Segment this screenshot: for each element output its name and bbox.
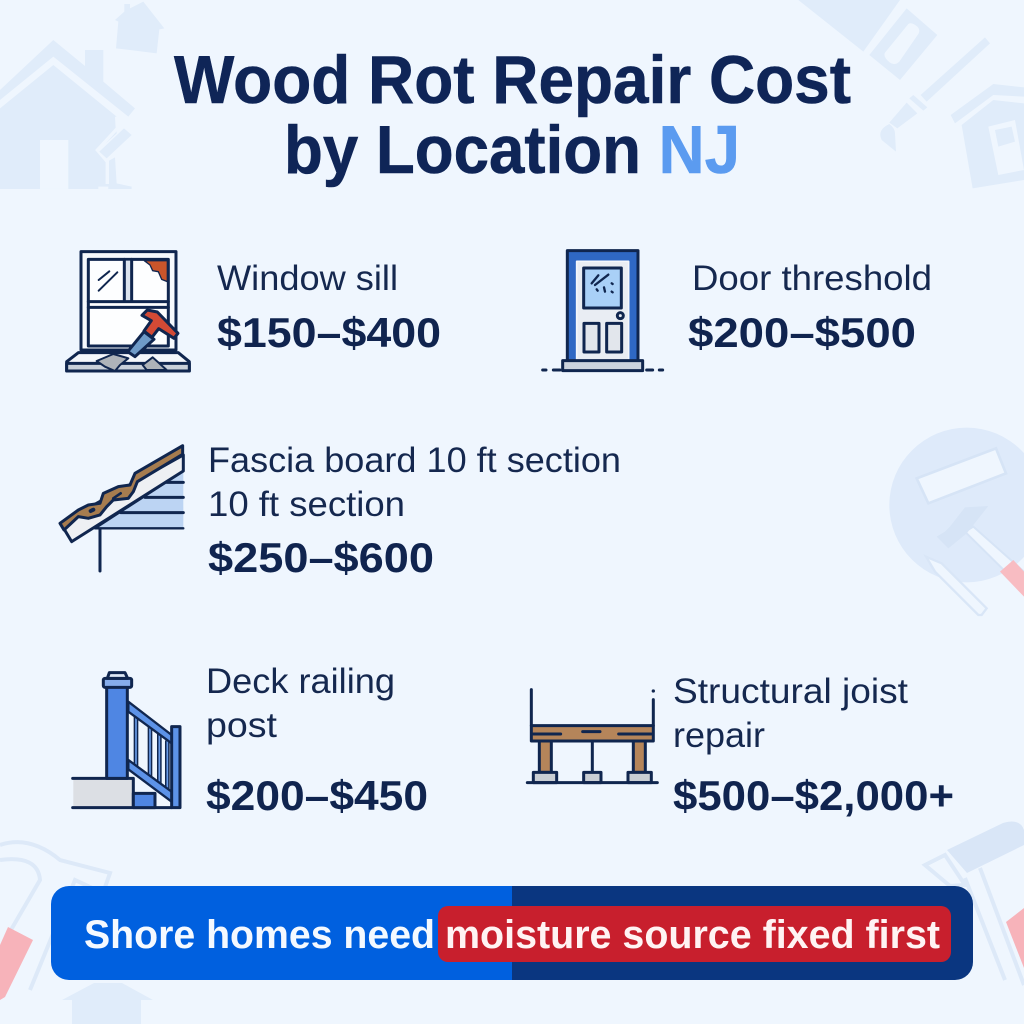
price: door threshold: $200–$500 xyxy=(688,309,916,356)
background: hammer bottom left xyxy=(0,842,110,1000)
item: door threshold xyxy=(543,251,932,371)
background: hammer bottom right xyxy=(925,822,1024,985)
label: fascia board: 10 ft section xyxy=(208,485,405,524)
title xyxy=(174,42,851,188)
label: deck railing post: Deck railing xyxy=(206,662,395,701)
label: structural joist xyxy=(673,672,908,755)
label: deck railing post: post xyxy=(206,706,277,745)
icon: joist xyxy=(527,689,657,783)
label: deck railing post xyxy=(206,662,395,745)
label: structural joist: repair xyxy=(673,716,765,755)
price: fascia board: $250–$600 xyxy=(208,534,434,581)
price: structural joist: $500–$2,000+ xyxy=(673,772,954,819)
callout banner: moisture source fixed first xyxy=(445,913,940,957)
callout banner: Shore homes need xyxy=(84,913,435,957)
title: Wood Rot Repair Cost xyxy=(174,42,851,118)
price: window sill: $150–$400 xyxy=(217,309,441,356)
icon: door xyxy=(543,251,663,371)
item: deck railing post xyxy=(73,662,428,819)
background: small house xyxy=(115,2,164,53)
price: deck railing post: $200–$450 xyxy=(206,772,428,819)
icon: rotted fascia board xyxy=(60,446,183,571)
icon: deck railing xyxy=(73,673,180,808)
background: house top left xyxy=(0,40,135,189)
callout banner xyxy=(51,886,973,980)
background: house top right xyxy=(951,84,1024,188)
title: by Location NJ xyxy=(284,112,740,188)
background: paint brush top right xyxy=(798,0,990,152)
background: house bottom left xyxy=(62,983,153,1024)
label: fascia board: Fascia board 10 ft section xyxy=(208,441,621,480)
background: tools circle right xyxy=(889,428,1024,615)
icon: window sill with hammer xyxy=(67,252,189,371)
label: door threshold: Door threshold xyxy=(692,259,932,298)
item: window sill xyxy=(67,252,441,371)
item: structural joist xyxy=(527,672,954,819)
label: window sill: Window sill xyxy=(217,259,398,298)
label: fascia board xyxy=(208,441,621,524)
label: structural joist: Structural joist xyxy=(673,672,908,711)
item: fascia board xyxy=(60,441,621,581)
